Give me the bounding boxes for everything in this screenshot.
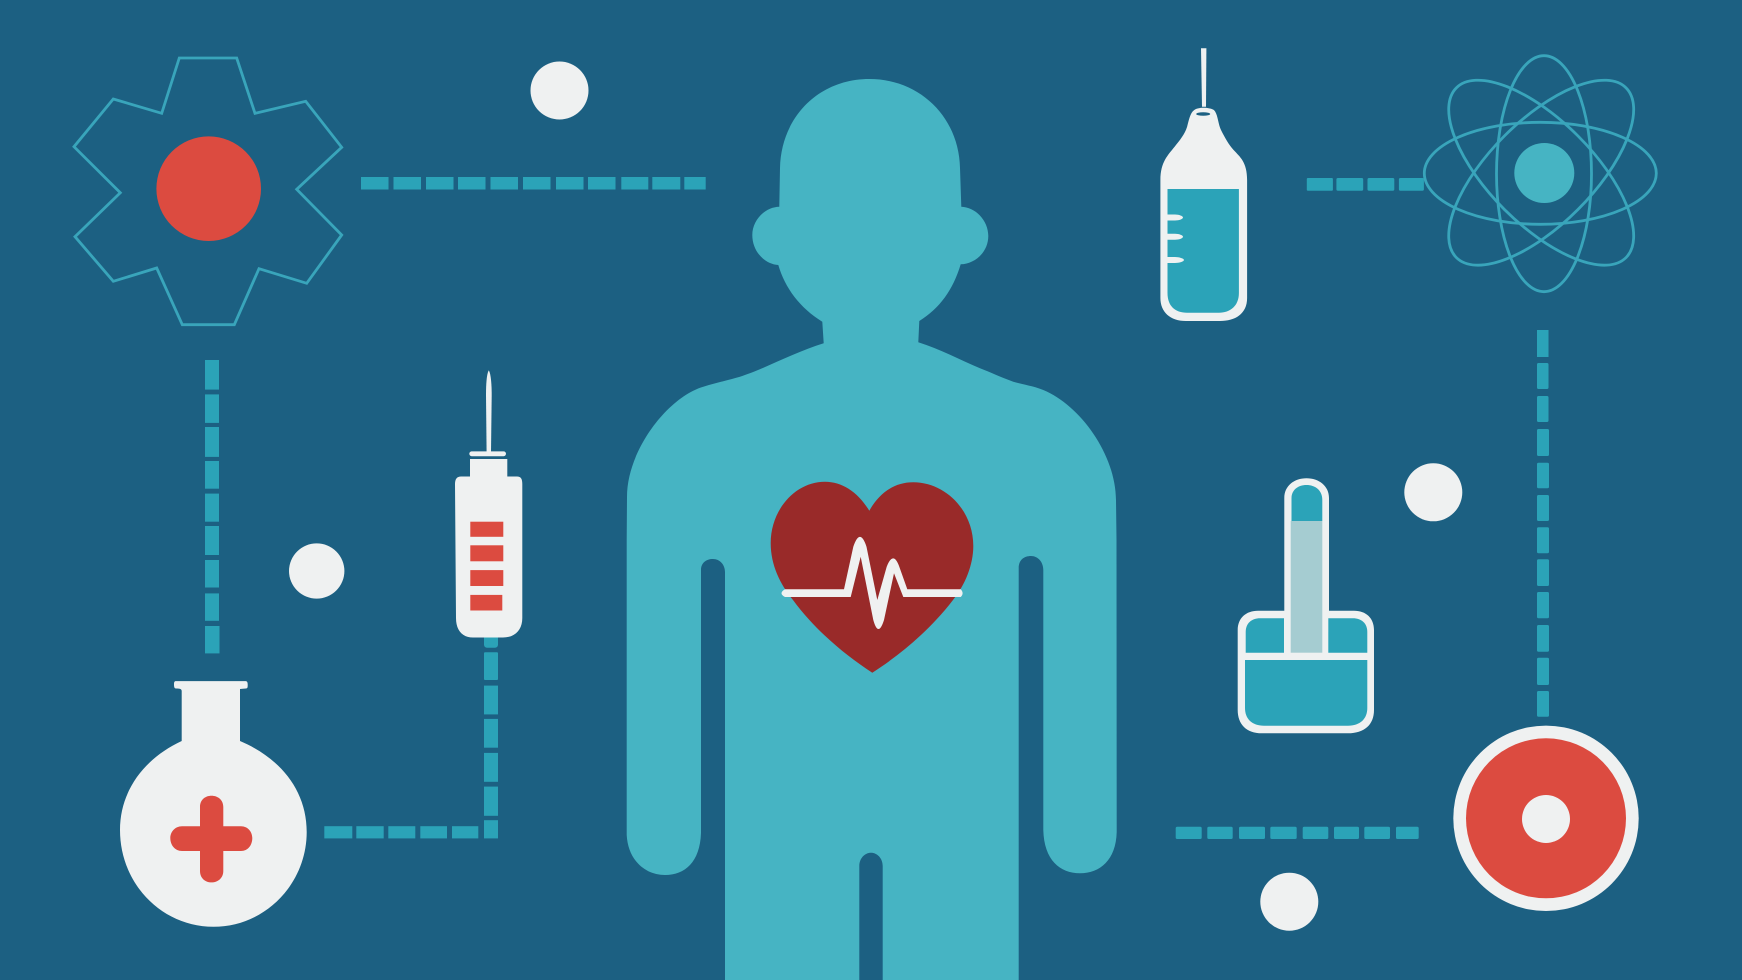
icon: syringe <box>455 370 522 638</box>
connector: syringe to flask, dashed <box>324 634 498 838</box>
device lower chamber <box>1245 660 1367 726</box>
connector: device to target, dashed <box>1176 827 1419 839</box>
finger shaft <box>1291 521 1322 653</box>
icon: gear with red centre <box>74 58 342 325</box>
decorative dot: right <box>1404 463 1462 521</box>
device upper left chamber <box>1246 618 1284 653</box>
connector: gear to flask, dashed <box>205 360 220 653</box>
bottle measurement ticks <box>1166 214 1184 263</box>
connector: atom to target, dashed <box>1537 330 1549 717</box>
bottle liquid <box>1168 189 1239 313</box>
human body silhouette <box>627 79 1117 980</box>
icon: heart with pulse line <box>771 482 973 673</box>
decorative dot: top left <box>530 62 588 120</box>
device upper right chamber <box>1328 618 1367 653</box>
connector: bottle to atom, dashed <box>1307 178 1424 191</box>
icon: round flask with red cross <box>120 681 307 927</box>
icon: medicine bottle <box>1160 48 1247 321</box>
pulse line <box>782 537 963 629</box>
icon: finger device <box>1238 478 1374 733</box>
syringe red level bars <box>470 522 503 610</box>
decorative dot: left <box>289 543 344 599</box>
decorative dot: bottom <box>1260 873 1318 931</box>
connector: gear to body, dashed <box>361 177 706 190</box>
finger tip <box>1292 485 1322 521</box>
icon: atom <box>1420 51 1663 294</box>
atom nucleus <box>1514 143 1574 203</box>
icon: red target circle <box>1453 726 1639 911</box>
red cross <box>170 796 252 882</box>
